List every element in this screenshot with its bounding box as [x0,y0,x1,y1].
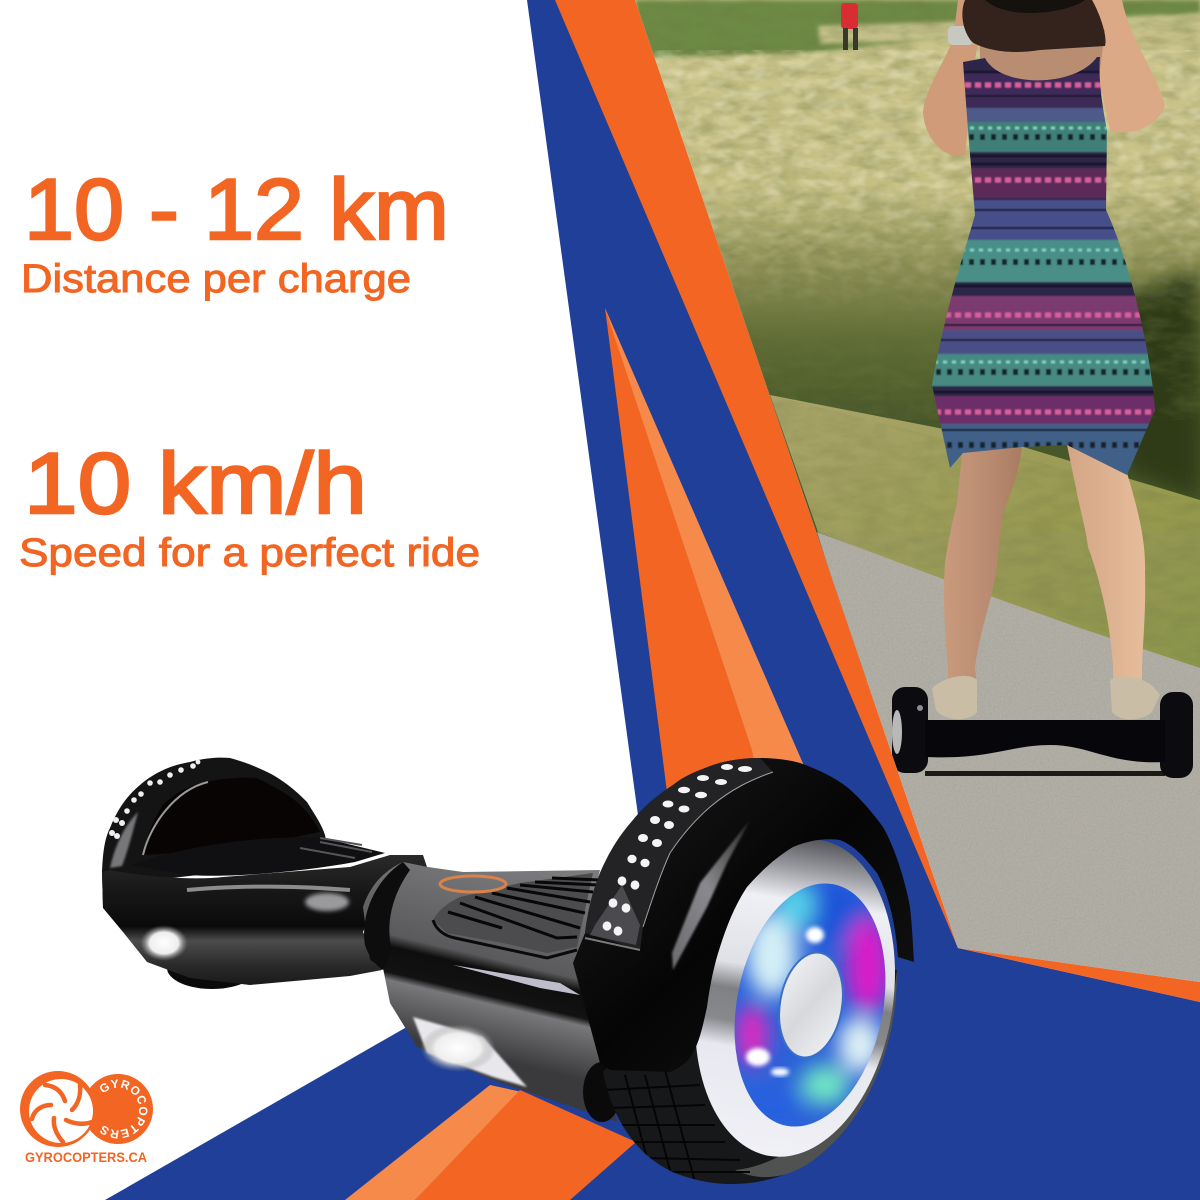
logo url: GYROCOPTERS.CA [25,1149,147,1165]
dress pattern [925,72,1165,445]
sandal right [1110,676,1160,720]
right circle [83,1074,153,1144]
left leg [944,445,1022,690]
blue bottom [747,1087,803,1123]
left circle [20,1071,96,1147]
wheel well [583,1062,621,1122]
cyan top left [775,880,815,930]
light disc [734,884,886,1126]
LED band rim highlight [643,772,773,927]
near headlight [413,1017,527,1087]
field texture light [653,50,1200,296]
lower grass verge [770,395,1200,680]
blue top [795,885,875,945]
big number: 10 km/h [24,436,367,532]
stat: distance [21,162,449,301]
grass texture [772,400,1200,620]
white cyan left [746,913,798,997]
orange inner spike [605,308,805,800]
tire [603,960,897,1184]
far body highlight [187,887,350,911]
tread [605,1070,750,1182]
stat: speed [19,436,480,575]
caption: Distance per charge [21,257,411,301]
far fender shine [143,782,208,855]
orange lower band [415,1090,636,1200]
fan blades [32,1085,92,1142]
light orange inner spike [605,308,808,790]
tire sidewall [735,970,897,1177]
far person [841,3,858,50]
far fender glints [917,705,923,711]
arm left [923,0,978,156]
road [817,532,1200,990]
white rim [673,825,917,1171]
left wheel rim [892,710,902,754]
board bar [925,720,1165,762]
pale track [818,14,1200,44]
magenta lower left [736,1005,768,1065]
far fender left glow [110,812,138,868]
far fender arch [143,778,320,855]
road texture [817,532,1200,990]
left wheel [892,687,928,773]
right leg [1067,445,1145,690]
green background verge [635,0,1200,58]
dress [925,50,1165,480]
sandal left [932,676,977,719]
logo: Gyrocopters [20,1071,153,1165]
near body [363,862,617,1122]
small hoverboard [892,687,1193,778]
magenta right [846,917,890,1013]
white glints [746,1048,770,1066]
field [635,0,1200,680]
far body [102,855,427,985]
join line [585,938,640,950]
far fender [102,758,330,908]
shoulders [980,30,1105,80]
green bottom right [801,1065,849,1105]
white lower right [838,1017,882,1073]
big number: 10 - 12 km [24,162,449,258]
far headlight [140,925,188,961]
body reflection [453,965,580,995]
dark hedge right [1128,260,1200,500]
arc text: GYROCOPTERS [100,1079,148,1139]
hoverboard product image [102,758,917,1184]
band lower gloss [590,885,640,945]
arm right [1092,0,1165,132]
orange lower-right band [958,948,1200,1002]
far foot pad [130,837,385,876]
left white disc [29,1079,93,1143]
near foot pad [433,873,600,958]
LED dots [603,764,752,936]
girl [923,0,1165,720]
hat brim [985,0,1085,13]
right wheel [1160,692,1193,778]
fender shine [672,820,750,970]
hair [962,0,1106,52]
light orange lower band [345,1085,522,1200]
near fender [573,758,914,1072]
orange diagonal strip [555,0,958,948]
hub [771,947,851,1063]
LED band [585,758,773,950]
field texture dark [635,0,1200,420]
watch [948,26,974,45]
small brand mark on deck [440,876,506,892]
photo: girl riding hoverboard [635,0,1200,990]
caption: Speed for a perfect ride [19,531,480,575]
far fender LEDs [109,760,200,839]
shadow [925,771,1165,776]
far wheel [167,947,257,989]
neck collar [364,862,410,970]
